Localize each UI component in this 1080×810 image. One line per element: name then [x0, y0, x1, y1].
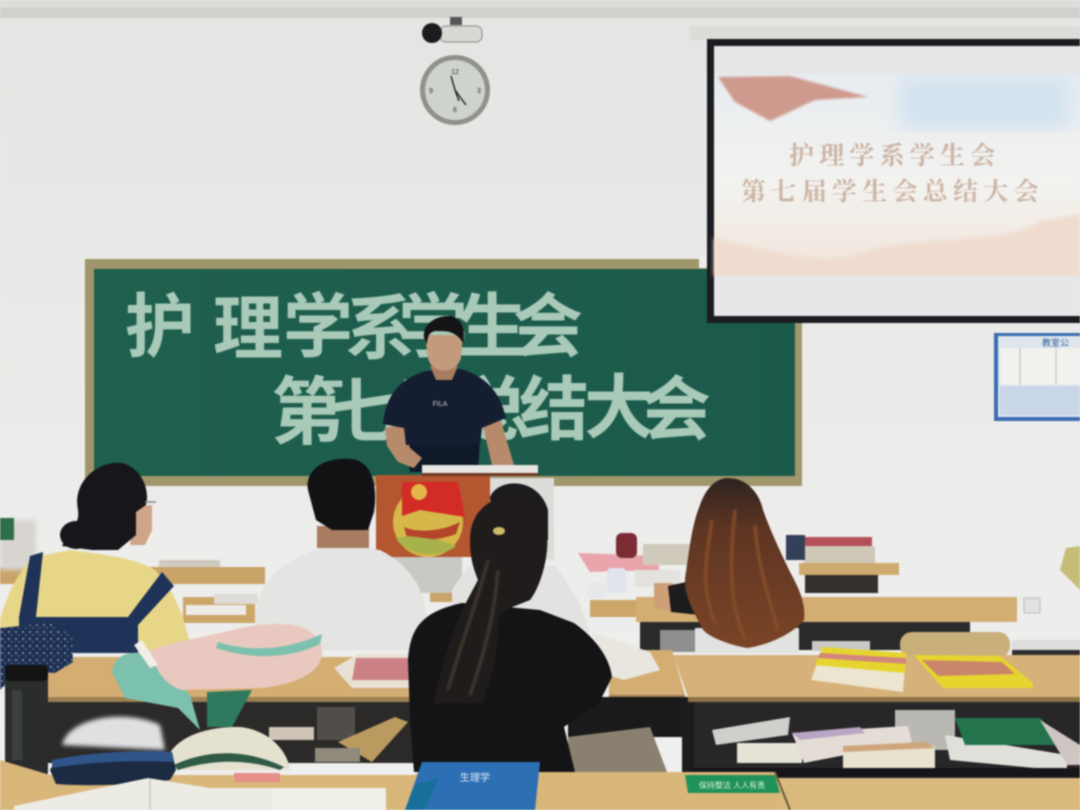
youth league emblem [393, 482, 465, 557]
chalk title: 护 [125, 288, 195, 366]
lectern [376, 465, 554, 593]
chalk title: 系 [345, 290, 415, 368]
wall clock [420, 55, 490, 125]
chalk title: 届 [395, 373, 465, 451]
pencil case [50, 751, 176, 785]
black water bottle [5, 665, 48, 778]
pink pencil [234, 773, 280, 782]
back desks row with books [0, 518, 1080, 658]
chalk title: 生 [457, 288, 527, 366]
notice board [994, 333, 1080, 421]
hidden student behind ponytail [452, 483, 590, 632]
projector screen [707, 39, 1080, 323]
navy patterned bag [0, 623, 73, 690]
chalkboard [85, 255, 809, 486]
green sticker sign [685, 775, 780, 793]
chalk title: 第 [271, 371, 345, 454]
slide title: 护理学系学生会 [789, 142, 1000, 170]
books under desk [690, 717, 1080, 777]
slide red flag [718, 76, 868, 121]
notice board: 教室公 [1042, 337, 1069, 348]
pink backpack [112, 624, 322, 730]
front right desk [673, 647, 1080, 778]
foreground desks [0, 760, 1080, 810]
student: yellow shirt with navy overalls [0, 463, 191, 653]
student: long brown hair [654, 478, 804, 653]
white cap [166, 727, 290, 770]
wall clock: 3 [477, 88, 481, 95]
wall clock: 9 [429, 88, 433, 95]
student: black top and ponytail [408, 497, 612, 772]
speaker: FILA [433, 401, 448, 408]
student: white shirt [255, 459, 426, 650]
chalk title: 总 [460, 371, 530, 449]
slide title: 第七届学生会总结大会 [741, 178, 1044, 206]
yellow textbook one [811, 647, 906, 692]
book on front left desk [334, 654, 412, 688]
speaker [383, 316, 514, 472]
chalk title: 会 [513, 288, 583, 366]
blue textbook [405, 762, 540, 810]
wall clock: 6 [453, 107, 457, 114]
chalk title: 会 [641, 371, 711, 449]
foreground open book [14, 778, 386, 810]
wall clock: 12 [451, 69, 459, 76]
security camera [422, 17, 482, 43]
white books on centre desk [592, 632, 660, 680]
chalk title: 学 [398, 288, 468, 366]
green sticker sign: 保持整洁 人人有责 [699, 780, 765, 790]
chalk title: 结 [519, 371, 589, 449]
yellow textbook two [914, 655, 1033, 688]
head and ponytail [434, 497, 547, 703]
blue textbook: 生理学 [460, 771, 490, 784]
chalk title: 大 [584, 369, 654, 447]
chalk title: 理 [213, 290, 283, 368]
chalk title: 七 [329, 373, 399, 451]
slide title [741, 142, 1044, 206]
chalk title: 学 [283, 288, 353, 366]
chalk title [125, 288, 711, 454]
slide hills [714, 214, 1080, 276]
front left desk [47, 650, 688, 772]
